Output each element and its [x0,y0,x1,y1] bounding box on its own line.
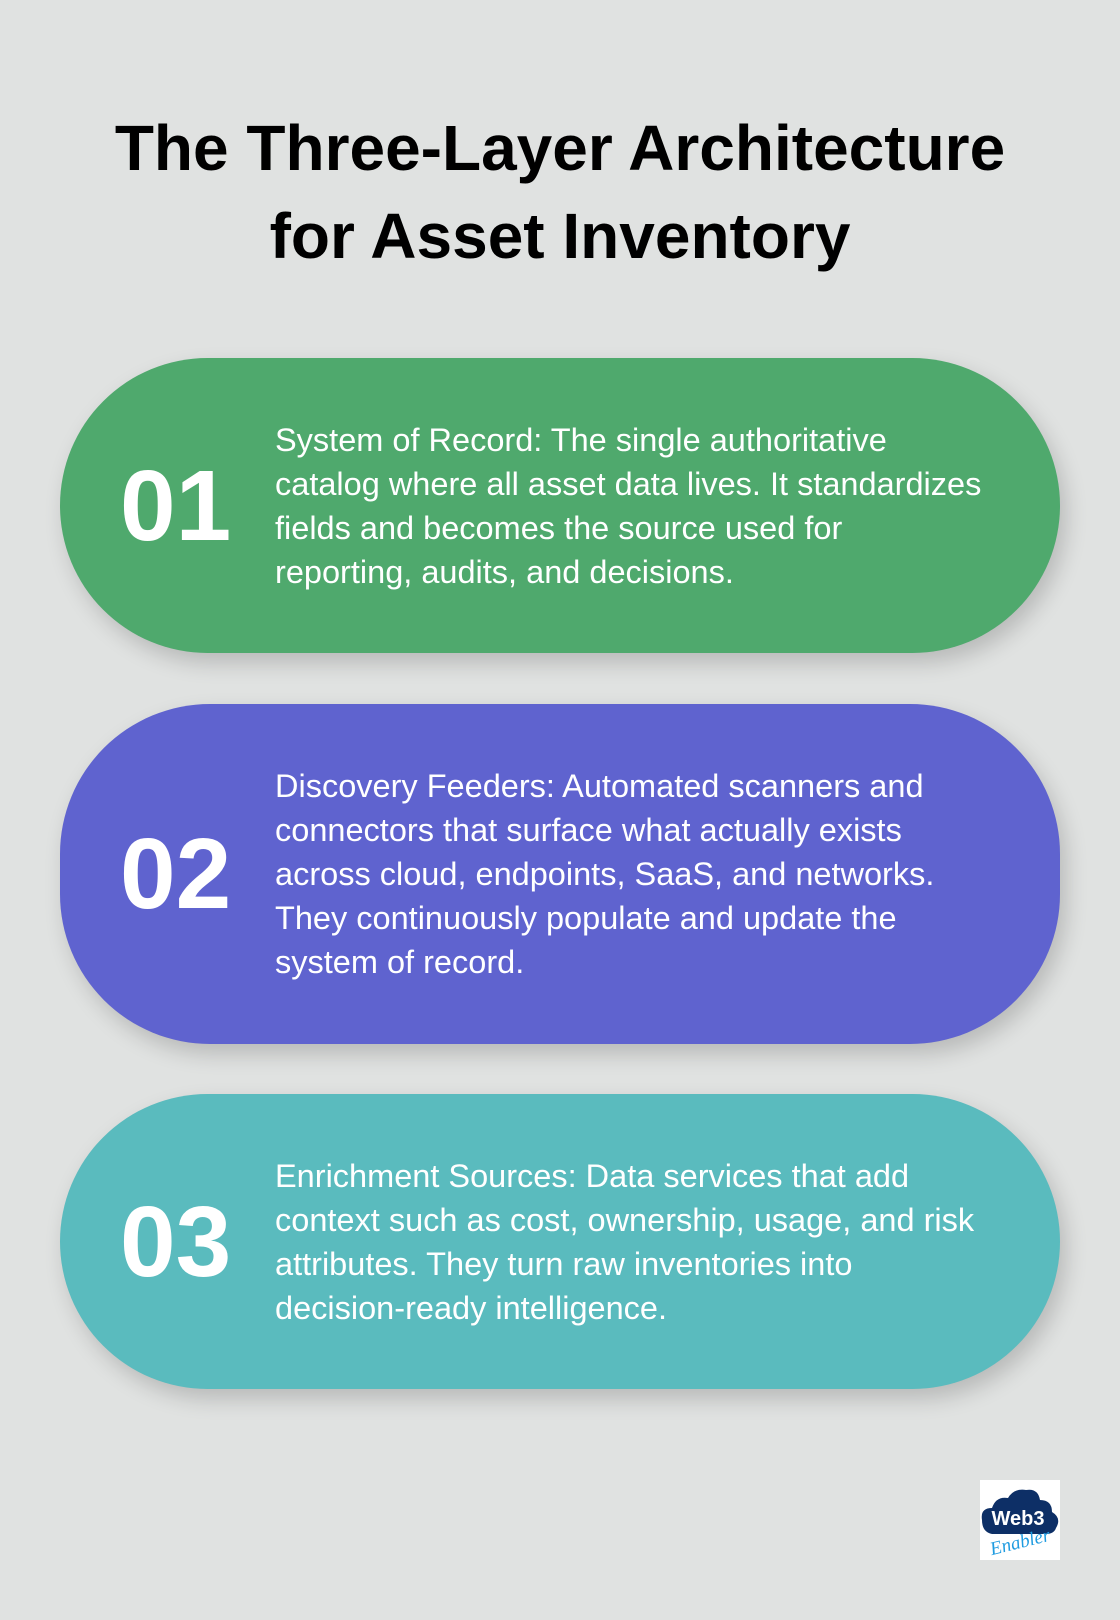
number 02: 02 [120,818,231,930]
text 01: reporting, audits, and decisions. [275,554,734,590]
text 01: catalog where all asset data lives. It standardizes [275,466,981,502]
text 01 [275,422,981,590]
text 02: They continuously populate and update the [275,900,897,936]
logo: Web3 Enabler: Web3 [992,1508,1044,1530]
panel: 01 system of record [60,358,1060,653]
title: The Three-Layer Architecture [115,112,1005,184]
text 02: Discovery Feeders: Automated scanners and [275,768,924,804]
text 02: across cloud, endpoints, SaaS, and networks. [275,856,934,892]
text 03: decision-ready intelligence. [275,1290,667,1326]
panel: 02 discovery feeders [60,704,1060,1044]
number 01: 01 [120,450,231,562]
number 03: 03 [120,1186,231,1298]
title [115,112,1005,272]
text 02: connectors that surface what actually exists [275,812,902,848]
text 01: fields and becomes the source used for [275,510,842,546]
text 01: System of Record: The single authoritative [275,422,887,458]
panel: 03 enrichment sources [60,1094,1060,1389]
text 02 [275,768,934,980]
text 03 [275,1158,974,1326]
text 03: context such as cost, ownership, usage, and risk [275,1202,974,1238]
text 02: system of record. [275,944,524,980]
text 03: attributes. They turn raw inventories into [275,1246,852,1282]
logo: Web3 Enabler [980,1480,1060,1560]
title: for Asset Inventory [270,200,850,272]
logo: Web3 Enabler: Enabler [987,1525,1053,1560]
text 03: Enrichment Sources: Data services that add [275,1158,909,1194]
